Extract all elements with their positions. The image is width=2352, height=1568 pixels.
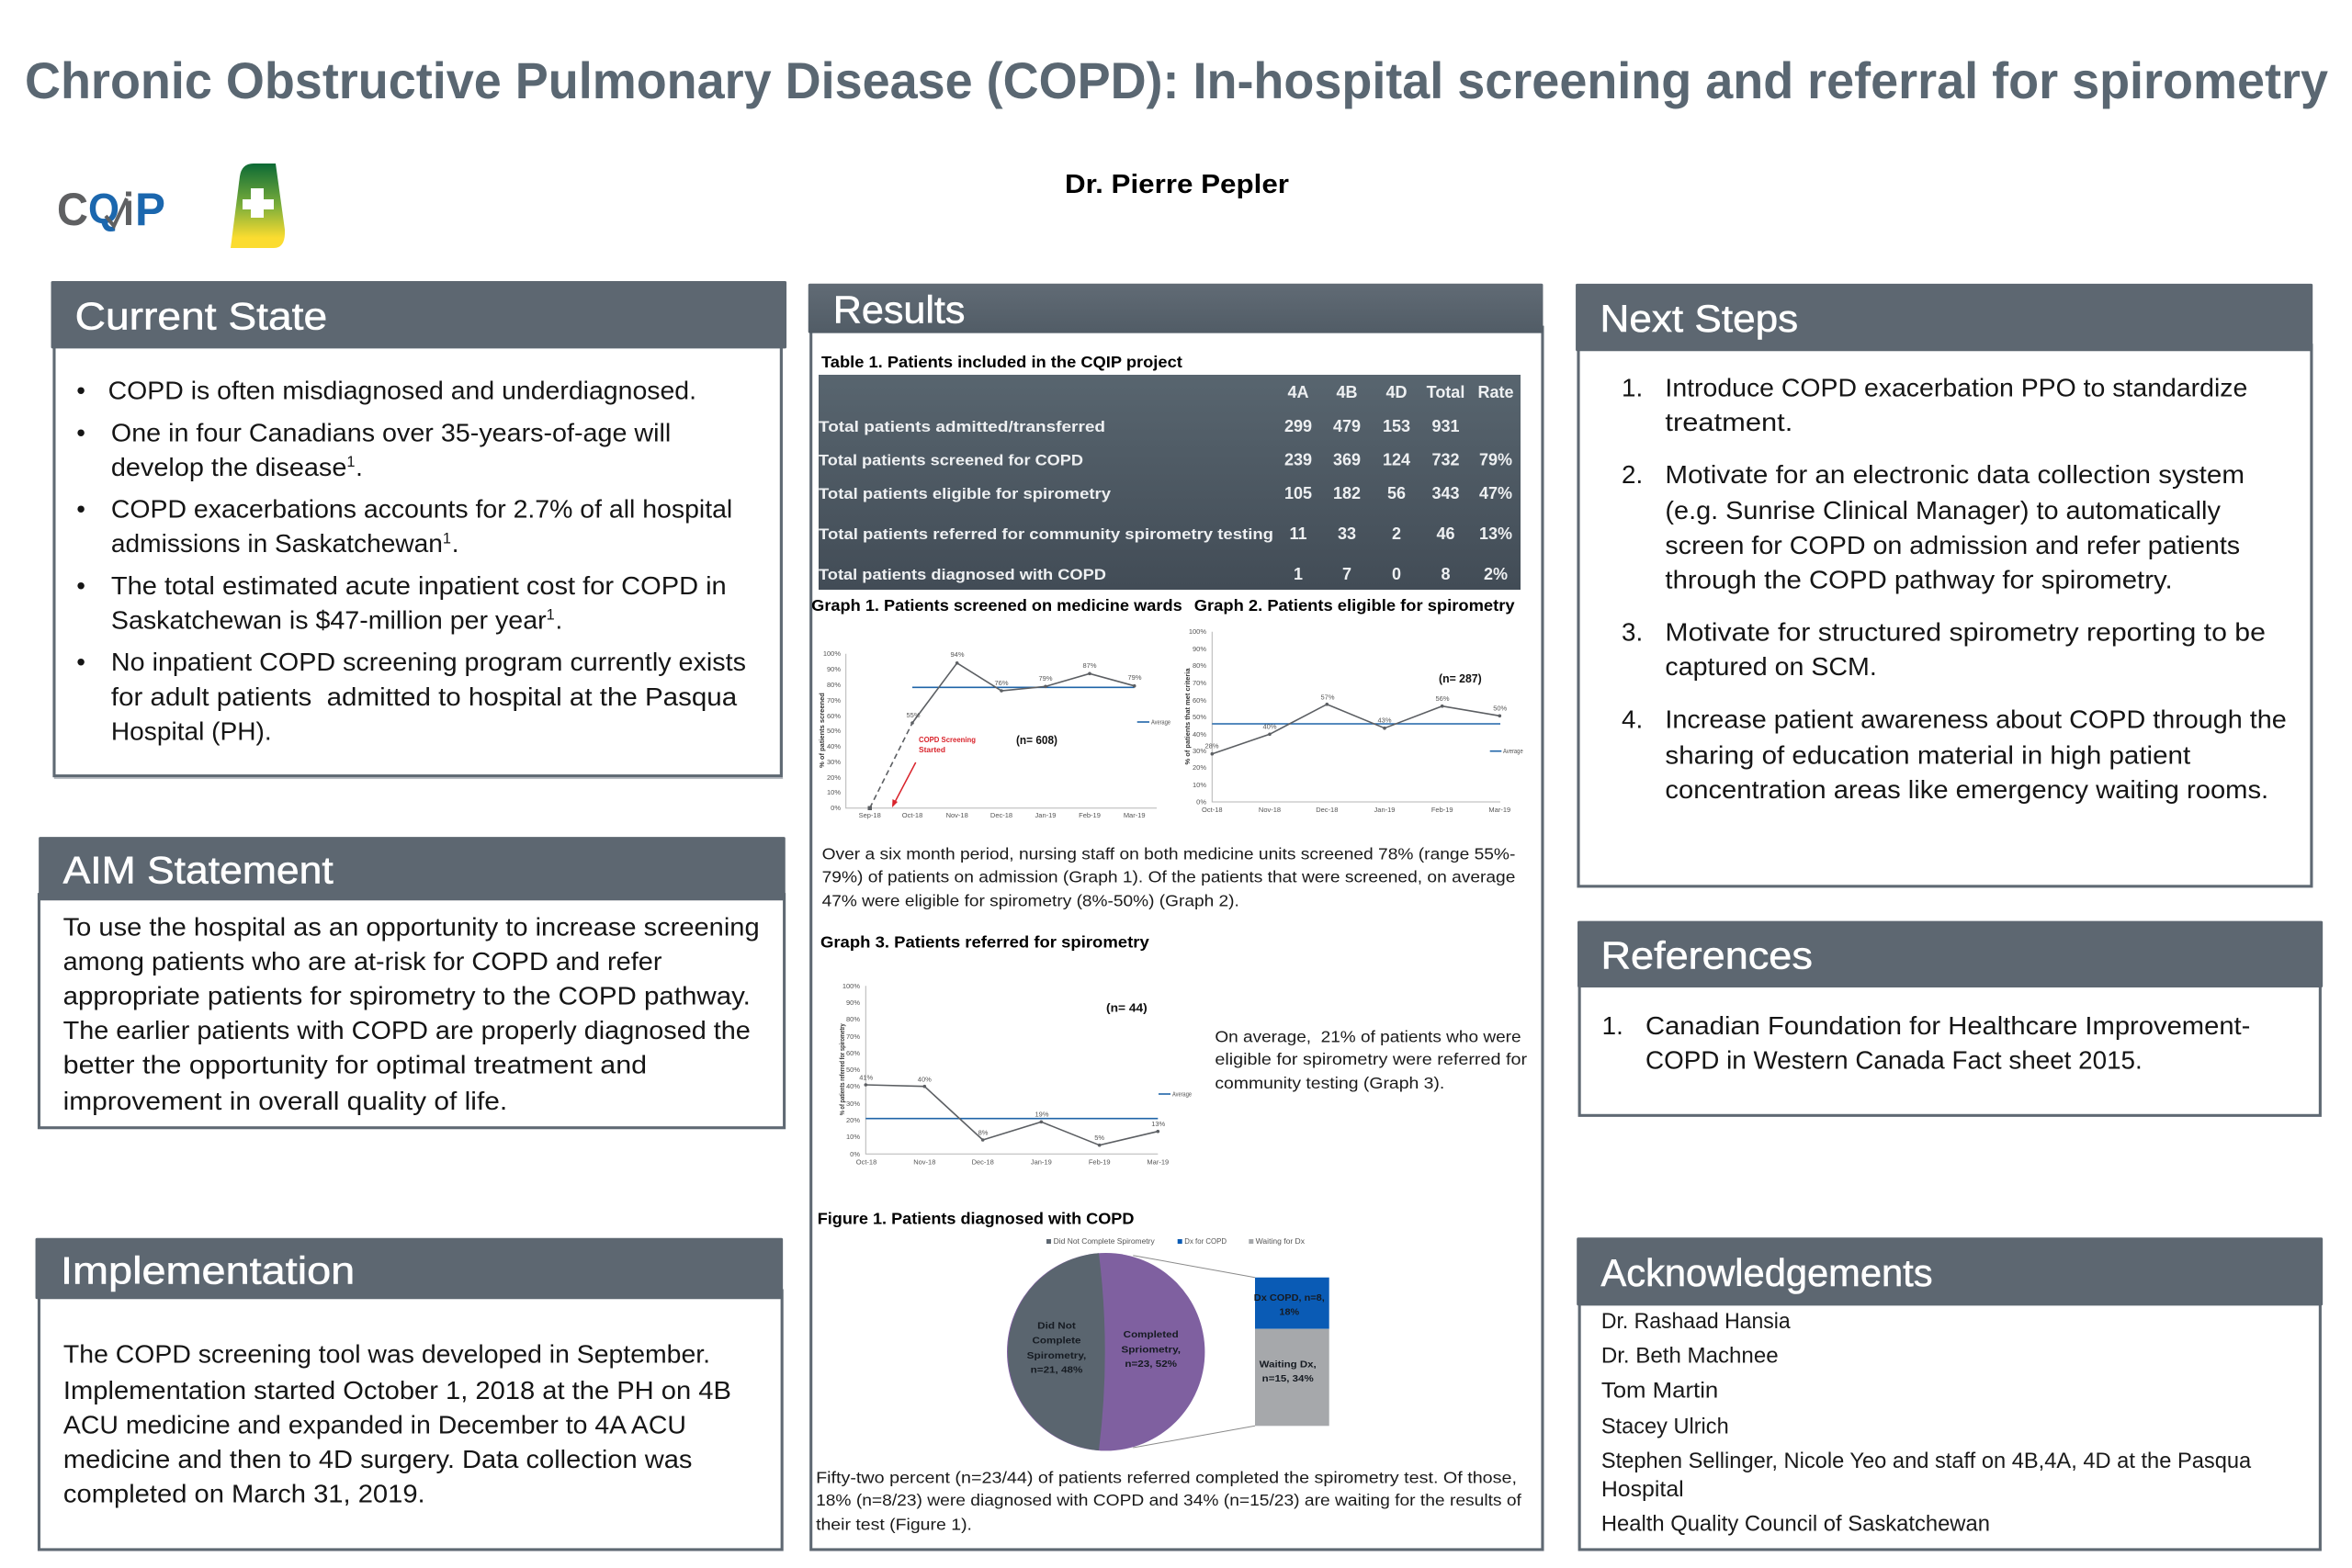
table 1: 1 xyxy=(1294,565,1303,583)
chart: graph 2 line chart: 43% xyxy=(1377,716,1392,724)
text: current state bullets: COPD exacerbations accounts for 2.7% of all hospital xyxy=(111,495,732,524)
heading: implementation: Implementation xyxy=(61,1249,355,1292)
text: current state bullets: . xyxy=(555,606,562,635)
bar: waiting dx segment xyxy=(1255,1329,1329,1426)
heading: current state xyxy=(51,281,786,348)
table 1: 182 xyxy=(1333,484,1361,502)
text: implementation: medicine and then to 4D surgery. Data collection was xyxy=(63,1445,692,1473)
chart: graph 2 line chart: Nov-18 xyxy=(1259,806,1281,814)
chart: graph 3 line chart: Jan-19 xyxy=(1031,1157,1052,1167)
logo: CQIP: i xyxy=(123,184,134,235)
text: next steps list: Introduce COPD exacerbation PPO to standardize xyxy=(1665,373,2247,401)
text: next steps list: sharing of education material in high patient xyxy=(1665,741,2191,770)
text: acknowledgements list: Health Quality Council of Saskatchewan xyxy=(1601,1512,1990,1537)
table 1: Total xyxy=(1427,383,1464,401)
chart: graph 1 line chart: 60% xyxy=(827,712,841,720)
text: graph 3 summary xyxy=(1215,1027,1527,1092)
chart: graph 3 line chart: 19% xyxy=(1035,1110,1049,1119)
chart: graph 1 line chart: 30% xyxy=(827,758,841,766)
chart: graph 1 line chart: Started xyxy=(919,745,945,754)
text: current state bullets: 1 xyxy=(443,530,451,547)
chart: figure 1 pie of pie xyxy=(1007,1237,1329,1450)
text: aim statement: To use the hospital as an opportunity to increase screening xyxy=(63,912,760,941)
text: implementation: ACU medicine and expanded in December to 4A ACU xyxy=(63,1411,686,1439)
text: next steps list: treatment. xyxy=(1665,408,1792,436)
chart: graph 3 line chart: Feb-19 xyxy=(1089,1157,1111,1167)
text: acknowledgements list: Hospital xyxy=(1601,1477,1684,1502)
table 1: 4D xyxy=(1385,383,1408,401)
chart: graph 1 line chart: 10% xyxy=(827,788,841,796)
chart: graph 1 line chart: (n= 608) xyxy=(1016,733,1057,747)
table 1: 153 xyxy=(1383,417,1410,435)
chart: graph 2 line chart: 20% xyxy=(1193,763,1206,772)
text: current state bullets: • xyxy=(76,571,85,600)
text: acknowledgements list: Stacey Ulrich xyxy=(1601,1415,1729,1439)
text: implementation xyxy=(63,1340,731,1508)
logo: CQIP: P xyxy=(135,184,165,235)
table 1: 46 xyxy=(1436,525,1455,543)
table 1: 2% xyxy=(1484,565,1508,583)
text: next steps list: screen for COPD on admission and refer patients xyxy=(1665,531,2240,559)
text: current state bullets: 1 xyxy=(547,607,555,624)
table 1: 369 xyxy=(1333,450,1361,468)
chart: graph 3 line chart: Average xyxy=(1172,1091,1192,1099)
text: implementation: completed on March 31, 2019. xyxy=(63,1480,425,1508)
table 1: 8 xyxy=(1441,565,1451,583)
text: next steps list: 3. xyxy=(1622,618,1643,647)
bar: dx copd segment xyxy=(1255,1278,1329,1329)
chart: figure 1 pie of pie: Dx COPD, n=8, xyxy=(1254,1292,1325,1303)
chart: graph 1 line chart: 94% xyxy=(950,650,965,659)
text: next steps list: concentration areas like emergency waiting rooms. xyxy=(1665,775,2268,804)
chart: figure 1 pie of pie: Spriometry, xyxy=(1121,1344,1181,1355)
chart: graph 3 line chart: Mar-19 xyxy=(1147,1157,1169,1167)
chart: graph 2 line chart: 80% xyxy=(1193,661,1206,670)
chart: graph 3 line chart: 0% xyxy=(850,1150,860,1158)
chart: figure 1 pie of pie: n=21, 48% xyxy=(1031,1364,1083,1375)
table 1: 56 xyxy=(1387,484,1406,502)
chart: graph 3 line chart: 13% xyxy=(1151,1120,1166,1128)
title: Chronic Obstructive Pulmonary Disease (COPD): In-hospital screening and referral for spirometry xyxy=(25,51,2328,109)
text: current state bullets: . xyxy=(356,453,363,481)
text: next steps list: 2. xyxy=(1622,460,1643,489)
chart: graph 1 line chart: 55% xyxy=(906,711,921,719)
chart: graph 1 line chart: 20% xyxy=(827,773,841,782)
panel: implementation xyxy=(36,1238,783,1550)
text: graph 3 summary: community testing (Graph 3). xyxy=(1215,1074,1444,1092)
table 1 xyxy=(819,375,1521,590)
text: references list xyxy=(1602,1011,2250,1075)
pie: completed spirometry slice xyxy=(1007,1253,1204,1450)
heading: implementation xyxy=(36,1238,783,1299)
chart: graph 2 line chart: Oct-18 xyxy=(1202,806,1223,814)
graph 3 title: Graph 3. Patients referred for spirometry xyxy=(820,932,1149,951)
chart: graph 1 line chart: Average xyxy=(1151,720,1170,726)
chart: graph 2 line chart: 100% xyxy=(1189,627,1206,636)
chart: graph 2 line chart: 90% xyxy=(1193,645,1206,653)
chart: graph 2 line chart: 57% xyxy=(1320,693,1335,702)
text: aim statement: appropriate patients for spirometry to the COPD pathway. xyxy=(63,981,751,1010)
chart: graph 2 line chart: 28% xyxy=(1204,742,1219,750)
heading: references xyxy=(1577,921,2323,987)
chart: graph 1 line chart: Jan-19 xyxy=(1035,811,1056,819)
text: next steps list xyxy=(1622,373,2287,804)
logo: green shield with cross xyxy=(231,164,285,248)
text: acknowledgements list: Dr. Beth Machnee xyxy=(1601,1344,1779,1369)
text: current state bullets: • xyxy=(76,495,85,524)
chart: graph 1 line chart: 0% xyxy=(831,804,841,812)
chart: graph 2 line chart: 50% xyxy=(1493,704,1508,713)
chart: graph 1 line chart: Oct-18 xyxy=(902,811,922,819)
heading: acknowledgements xyxy=(1577,1237,2323,1305)
chart: graph 1 line chart: 90% xyxy=(827,665,841,673)
chart: graph 3 line chart: (n= 44) xyxy=(1106,1000,1148,1014)
heading: next steps xyxy=(1576,284,2312,351)
text: aim statement: improvement in overall quality of life. xyxy=(63,1087,507,1115)
panel: aim statement xyxy=(39,837,786,1128)
table 1: 124 xyxy=(1383,450,1410,468)
table 1: 479 xyxy=(1333,417,1361,435)
text: current state bullets: 1 xyxy=(346,454,355,470)
table 1: 105 xyxy=(1284,484,1312,502)
chart: graph 3 line chart: 70% xyxy=(846,1032,860,1041)
text: aim statement: better the opportunity for optimal treatment and xyxy=(63,1051,647,1079)
text: current state bullets: • xyxy=(76,418,85,446)
table 1: 343 xyxy=(1431,484,1460,502)
chart: graph 1 line chart: Feb-19 xyxy=(1079,811,1101,819)
figure 1 title: Figure 1. Patients diagnosed with COPD xyxy=(818,1210,1134,1228)
text: references list: Canadian Foundation for Healthcare Improvement- xyxy=(1645,1011,2250,1040)
chart: graph 1 line chart: 40% xyxy=(827,742,841,750)
table 1: 732 xyxy=(1431,450,1460,468)
text: next steps list: Motivate for structured spirometry reporting to be xyxy=(1665,618,2266,647)
legend: figure 1 xyxy=(1046,1237,1305,1246)
panel: acknowledgements xyxy=(1577,1237,2323,1550)
chart: graph 2 line chart: Feb-19 xyxy=(1431,806,1453,814)
chart: graph 3 line chart: % of patients referred for spirometry xyxy=(838,1023,846,1115)
text: next steps list: (e.g. Sunrise Clinical Manager) to automatically xyxy=(1665,496,2221,525)
graph 2 title: Graph 2. Patients eligible for spirometry xyxy=(1194,596,1515,615)
panel: next steps xyxy=(1576,284,2312,886)
text: current state bullets: One in four Canadians over 35-years-of-age will xyxy=(111,418,671,446)
table 1: 7 xyxy=(1342,565,1351,583)
panel: references xyxy=(1577,921,2323,1115)
text: references list: COPD in Western Canada Fact sheet 2015. xyxy=(1645,1046,2143,1075)
chart: graph 2 line chart: 40% xyxy=(1262,722,1277,731)
table 1: Total patients referred for community spirometry testing xyxy=(819,525,1273,543)
chart: graph 3 line chart: 8% xyxy=(978,1128,989,1137)
chart: graph 1 line chart: COPD Screening xyxy=(919,735,976,744)
chart: figure 1 pie of pie: n=15, 34% xyxy=(1262,1373,1314,1384)
table title: Table 1. Patients included in the CQIP project xyxy=(821,353,1182,371)
text: current state bullets: No inpatient COPD screening program currently exists xyxy=(111,648,746,676)
table 1: 0 xyxy=(1392,565,1401,583)
heading: aim statement: AIM Statement xyxy=(63,848,334,891)
logo: CQIP: C xyxy=(57,184,88,235)
chart: graph 2 line chart: 60% xyxy=(1193,696,1206,705)
text: current state bullets: Saskatchewan is $47-million per year xyxy=(111,606,547,635)
text: aim statement xyxy=(63,912,760,1115)
pie: did not complete slice xyxy=(1008,1253,1105,1450)
chart: graph 3 line chart: 100% xyxy=(842,982,860,990)
heading: aim statement xyxy=(39,837,786,900)
author: Dr. Pierre Pepler xyxy=(1065,170,1289,199)
table 1: Total patients eligible for spirometry xyxy=(819,485,1112,502)
chart: graph 3 line chart xyxy=(838,982,1192,1167)
table 1: 931 xyxy=(1431,417,1460,435)
text: current state bullets: develop the disease xyxy=(111,453,346,481)
chart: graph 2 line chart: Jan-19 xyxy=(1374,806,1395,814)
chart: graph 3 line chart: Dec-18 xyxy=(972,1157,994,1167)
text: current state bullets: admissions in Saskatchewan xyxy=(111,529,443,558)
text: references list: 1. xyxy=(1602,1011,1623,1040)
text: current state bullets: Hospital (PH). xyxy=(111,716,272,745)
legend: figure 1: Dx for COPD xyxy=(1184,1237,1227,1246)
chart: graph 3 line chart: 40% xyxy=(918,1075,932,1084)
text: next steps list: through the COPD pathway for spirometry. xyxy=(1665,565,2173,593)
text: acknowledgements list: Dr. Rashaad Hansia xyxy=(1601,1309,1791,1334)
chart: graph 2 line chart: 30% xyxy=(1193,747,1206,755)
heading: references: References xyxy=(1601,934,1813,977)
text: aim statement: The earlier patients with COPD are properly diagnosed the xyxy=(63,1016,751,1044)
table 1: 47% xyxy=(1479,484,1512,502)
table 1: 13% xyxy=(1479,525,1512,543)
logo: CQIP: Q xyxy=(88,185,119,232)
text: graphs 1 and 2 summary: 79%) of patients on admission (Graph 1). Of the patients that were screened, on average xyxy=(822,868,1515,886)
chart: graph 3 line chart: 40% xyxy=(846,1082,860,1090)
chart: graph 3 line chart: 80% xyxy=(846,1015,860,1023)
legend: figure 1: Waiting for Dx xyxy=(1256,1237,1305,1246)
chart: graph 1 line chart: 50% xyxy=(827,727,841,735)
text: current state bullets: • xyxy=(76,377,85,405)
table 1: 33 xyxy=(1338,525,1356,543)
chart: graph 1 line chart: Mar-19 xyxy=(1124,811,1146,819)
heading: next steps: Next Steps xyxy=(1600,297,1798,340)
text: current state bullets xyxy=(76,377,746,745)
logo: CQIP xyxy=(57,184,165,235)
chart: graph 2 line chart: 56% xyxy=(1435,694,1450,703)
text: acknowledgements list: Tom Martin xyxy=(1601,1378,1718,1403)
text: graphs 1 and 2 summary: 47% were eligible for spirometry (8%-50%) (Graph 2). xyxy=(822,892,1239,910)
chart: figure 1 pie of pie: Complete xyxy=(1033,1336,1081,1347)
chart: graph 2 line chart: (n= 287) xyxy=(1439,671,1482,685)
chart: graph 1 line chart: 87% xyxy=(1082,661,1097,670)
chart: graph 3 line chart: Nov-18 xyxy=(913,1157,935,1167)
text: figure 1 summary xyxy=(816,1469,1522,1533)
text: figure 1 summary: Fifty-two percent (n=23/44) of patients referred completed the spirometry test. Of those, xyxy=(816,1469,1517,1487)
text: implementation: Implementation started October 1, 2018 at the PH on 4B xyxy=(63,1376,731,1404)
text: current state bullets: for adult patients admitted to hospital at the Pasqua xyxy=(111,682,738,711)
text: next steps list: Increase patient awareness about COPD through the xyxy=(1665,705,2287,733)
chart: graph 2 line chart: 50% xyxy=(1193,713,1206,721)
chart: graph 2 line chart: 10% xyxy=(1193,781,1206,789)
chart: graph 3 line chart: Oct-18 xyxy=(856,1157,876,1167)
heading: results: Results xyxy=(833,288,965,332)
chart: graph 1 line chart: Nov-18 xyxy=(946,811,968,819)
chart: graph 1 line chart: 80% xyxy=(827,681,841,689)
chart: graph 2 line chart: Average xyxy=(1503,749,1523,755)
text: current state bullets: • xyxy=(76,648,85,676)
chart: graph 2 line chart xyxy=(1183,627,1523,814)
text: current state bullets: . xyxy=(452,529,458,558)
text: graphs 1 and 2 summary xyxy=(822,844,1515,910)
chart: graph 1 line chart: 76% xyxy=(994,679,1009,687)
chart: graph 2 line chart: % of patients that met criteria xyxy=(1183,668,1192,765)
chart: graph 3 line chart: 5% xyxy=(1094,1134,1104,1142)
text: graph 3 summary: eligible for spirometry were referred for xyxy=(1215,1050,1527,1068)
chart: graph 3 line chart: 30% xyxy=(846,1100,860,1108)
table 1: 2 xyxy=(1392,525,1401,543)
graph 1 title: Graph 1. Patients screened on medicine wards xyxy=(811,596,1182,615)
chart: graph 1 line chart: Sep-18 xyxy=(859,811,881,819)
text: next steps list: Motivate for an electronic data collection system xyxy=(1665,460,2245,489)
chart: graph 3 line chart: 50% xyxy=(846,1066,860,1074)
chart: graph 3 line chart: 60% xyxy=(846,1049,860,1057)
chart: graph 3 line chart: 41% xyxy=(859,1073,874,1082)
table 1: 239 xyxy=(1284,450,1312,468)
text: acknowledgements list xyxy=(1601,1309,2252,1537)
table 1: 4A xyxy=(1287,383,1309,401)
chart: graph 1 line chart: 79% xyxy=(1127,673,1142,682)
text: current state bullets: COPD is often misdiagnosed and underdiagnosed. xyxy=(108,377,696,405)
chart: graph 3 line chart: 90% xyxy=(846,998,860,1007)
text: acknowledgements list: Stephen Sellinger, Nicole Yeo and staff on 4B,4A, 4D at the Pasqua xyxy=(1601,1449,2252,1473)
table 1: Rate xyxy=(1477,383,1514,401)
heading: current state: Current State xyxy=(75,294,327,337)
panel: results frame xyxy=(808,284,1543,1550)
heading: acknowledgements: Acknowledgements xyxy=(1601,1251,1933,1294)
chart: graph 1 line chart: 70% xyxy=(827,696,841,705)
chart: graph 3 line chart: 10% xyxy=(846,1133,860,1141)
chart: graph 2 line chart: Mar-19 xyxy=(1488,806,1510,814)
text: figure 1 summary: 18% (n=8/23) were diagnosed with COPD and 34% (n=15/23) are waiting for the results of xyxy=(816,1491,1522,1509)
chart: graph 2 line chart: 0% xyxy=(1196,797,1206,807)
table 1: 4B xyxy=(1336,383,1358,401)
chart: figure 1 pie of pie: Spirometry, xyxy=(1027,1350,1086,1361)
text: graphs 1 and 2 summary: Over a six month period, nursing staff on both medicine units screened 78% (range 55%- xyxy=(822,844,1515,863)
table 1: Total patients diagnosed with COPD xyxy=(819,566,1106,583)
table 1: 79% xyxy=(1479,450,1512,468)
chart: figure 1 pie of pie: Did Not xyxy=(1037,1321,1076,1332)
chart: graph 3 line chart: 20% xyxy=(846,1116,860,1124)
chart: graph 1 line chart: 79% xyxy=(1038,674,1053,682)
chart: graph 1 line chart: Dec-18 xyxy=(990,811,1012,819)
text: graph 3 summary: On average, 21% of patients who were xyxy=(1215,1027,1521,1045)
chart: figure 1 pie of pie: Waiting Dx, xyxy=(1260,1359,1317,1370)
chart: graph 2 line chart: Dec-18 xyxy=(1316,806,1338,814)
chart: graph 2 line chart: 70% xyxy=(1193,679,1206,687)
panel: current state xyxy=(51,281,786,778)
chart: graph 1 line chart: % of patients screened xyxy=(818,693,826,768)
text: current state bullets: The total estimated acute inpatient cost for COPD in xyxy=(111,571,727,600)
chart: graph 1 line chart xyxy=(818,649,1170,819)
legend: figure 1: Did Not Complete Spirometry xyxy=(1054,1237,1155,1246)
text: next steps list: 1. xyxy=(1622,373,1643,401)
heading: results xyxy=(808,284,1543,333)
chart: graph 1 line chart: 100% xyxy=(823,649,841,658)
table 1: 11 xyxy=(1289,525,1307,543)
chart: figure 1 pie of pie: Completed xyxy=(1124,1329,1179,1340)
table 1: Total patients screened for COPD xyxy=(819,452,1083,468)
text: next steps list: captured on SCM. xyxy=(1665,652,1877,681)
text: next steps list: 4. xyxy=(1622,705,1643,733)
table 1: 299 xyxy=(1284,417,1312,435)
chart: figure 1 pie of pie: n=23, 52% xyxy=(1125,1359,1178,1370)
text: aim statement: among patients who are at-risk for COPD and refer xyxy=(63,947,662,976)
table 1: Total patients admitted/transferred xyxy=(819,418,1105,435)
chart: figure 1 pie of pie: 18% xyxy=(1279,1307,1300,1318)
chart: graph 2 line chart: 40% xyxy=(1193,730,1206,739)
text: implementation: The COPD screening tool was developed in September. xyxy=(63,1340,710,1369)
text: figure 1 summary: their test (Figure 1). xyxy=(816,1515,972,1533)
